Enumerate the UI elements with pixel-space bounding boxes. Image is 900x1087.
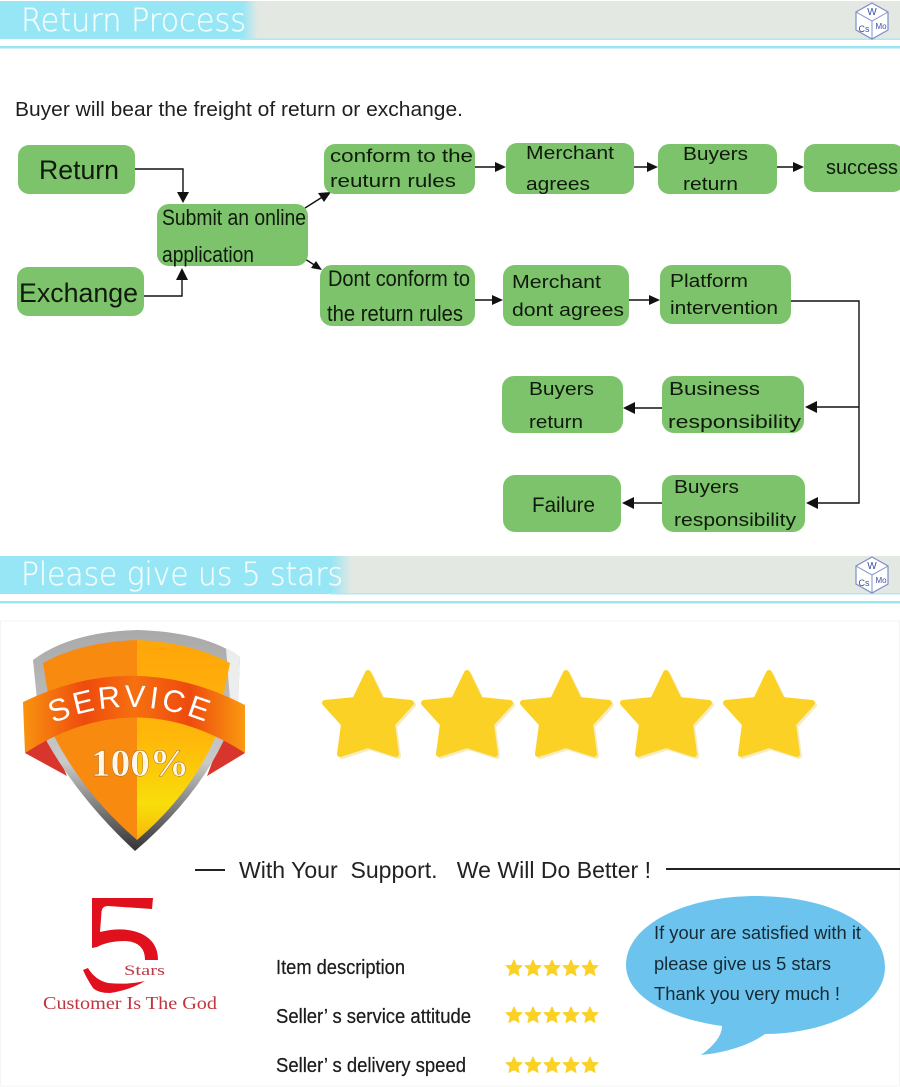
row: item description [276,957,598,979]
badge text: 100%: 100% [91,742,189,785]
node: Merchant agrees: agrees [526,174,590,194]
node: Platform intervention [660,265,791,324]
shield body right [137,640,230,840]
label: Stars: Stars [124,963,165,979]
node: Merchant dont agrees: dont agrees [512,300,624,320]
node: Submit an online application: application [162,242,254,267]
row: delivery speed [276,1055,598,1077]
logo: 5 Stars Customer Is The God [43,898,217,1013]
heading: Please give us 5 stars: Please give us 5 stars [21,555,343,593]
ribbon [23,676,245,753]
icon: Service 100% shield badge [23,630,245,851]
row: item description: Item description [276,957,405,979]
callout: speech bubble: If your are satisfied with it [654,923,861,943]
ribbon text: SERVICE: SERVICE [49,685,210,722]
node: conform to the return rules [324,144,475,194]
node: Return [18,145,135,194]
ribbon tails [25,736,67,776]
row: service attitude: Seller’ s service attitude [276,1006,471,1028]
icon: WCsMo cube logo (second): Cs [858,578,870,588]
node: Platform intervention: intervention [670,298,778,318]
node: Buyers responsibility: Buyers [674,477,739,497]
node: Buyers return (second): Buyers [529,379,594,399]
node: Business responsibility: Business [669,379,760,399]
icon: WCsMo cube logo (second): W [867,561,877,572]
numeral 5 shape [83,898,158,993]
header: Please give us 5 stars [0,555,900,604]
rating stars: five large stars [325,673,814,756]
node: Dont conform to the return rules: Dont conform to [328,266,470,291]
node: Dont conform to the return rules: the return rules [327,301,463,326]
node: Merchant agrees: Merchant [526,143,614,163]
header: Return Process [0,1,900,48]
row: service attitude [276,1006,598,1028]
node: Submit an online application: Submit an online [162,205,306,230]
node: Dont conform to the return rules [320,265,475,326]
node: Business responsibility [662,376,804,433]
node: Return: Return [39,155,119,185]
node: Exchange [17,267,144,316]
node: success [804,144,900,192]
node: conform to the return rules: reuturn rules [330,171,456,191]
icon: WCsMo cube logo (second) [856,557,888,593]
node: Buyers return (second): return [529,412,583,432]
node: Buyers return (second) [502,376,623,433]
shield rim [33,630,240,851]
node: conform to the return rules: conform to the [330,146,473,166]
shield body left [43,640,137,840]
row: delivery speed: Seller’ s delivery speed [276,1055,466,1077]
node: Buyers return: Buyers [683,144,748,164]
node: Merchant dont agrees: Merchant [512,272,601,292]
image frame edge [0,621,900,1086]
node: Merchant agrees [506,143,634,194]
node: Platform intervention: Platform [670,271,748,291]
node: Business responsibility: responsibility [668,412,801,432]
icon: WCsMo cube logo (second): Mo [875,576,887,585]
node: Exchange: Exchange [19,278,138,308]
callout: speech bubble [626,896,885,1055]
text: freight note: Buyer will bear the freight of return or exchange. [15,99,463,121]
node: Failure [503,475,621,532]
connector arrows [135,162,859,509]
rating table [276,957,598,1077]
icon: WCsMo cube logo: Cs [858,24,870,34]
node: Buyers responsibility [662,475,805,532]
node: Submit an online application [157,204,308,267]
flowchart: return process [17,143,900,532]
callout: speech bubble: Thank you very much ! [654,984,840,1004]
tagline with rules: With Your Support. We Will Do Better ! [239,857,651,883]
node: Failure: Failure [532,494,595,517]
node: Buyers responsibility: responsibility [674,510,796,530]
label: Customer Is The God: Customer Is The God [43,993,217,1013]
callout: speech bubble: please give us 5 stars [654,954,831,974]
node: Merchant dont agrees [503,265,629,326]
heading: Return Process: Return Process [21,1,246,39]
icon: WCsMo cube logo [856,3,888,39]
node: Buyers return: return [683,174,738,194]
node: success: success [826,157,898,179]
node: Buyers return [658,144,777,194]
icon: WCsMo cube logo: W [867,7,877,18]
icon: WCsMo cube logo: Mo [875,22,887,31]
